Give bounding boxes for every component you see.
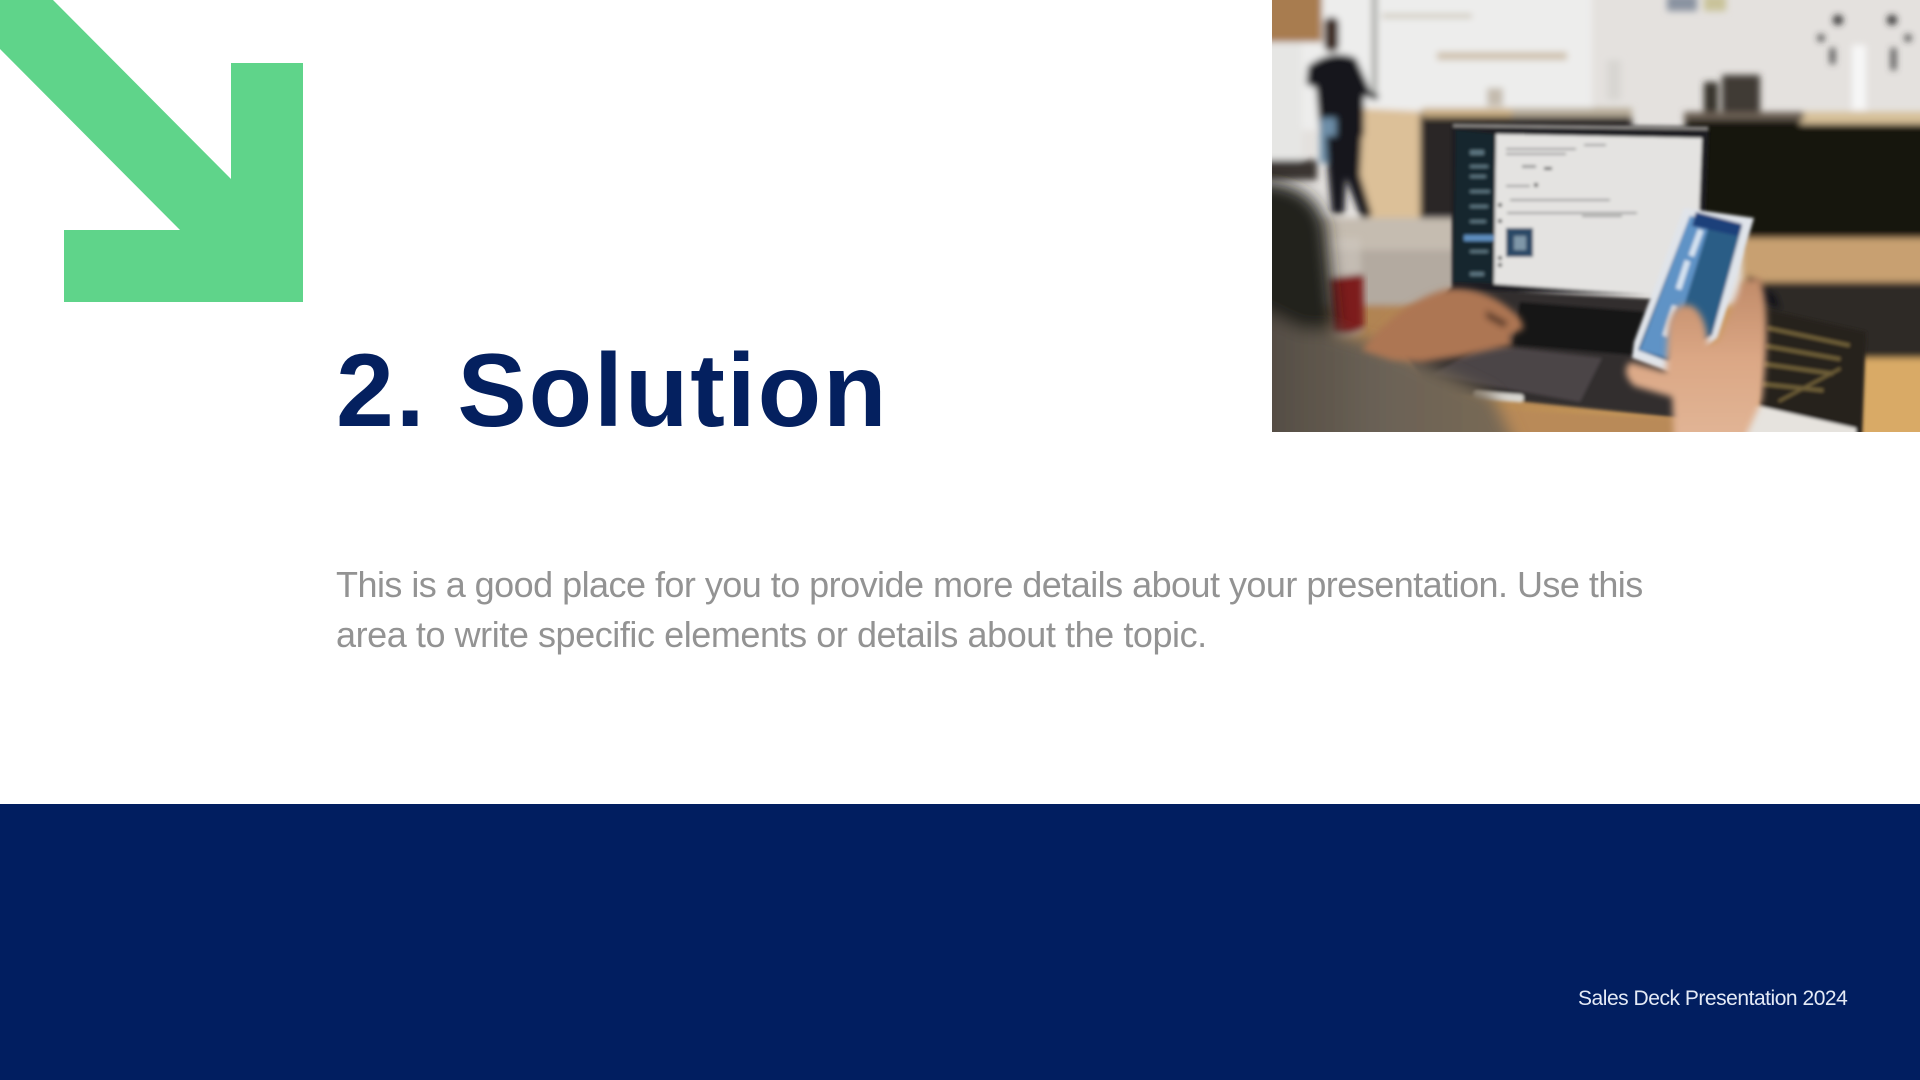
foreground shoulder and hair	[1272, 300, 1518, 432]
dark laptop bag right	[1752, 282, 1920, 358]
shelf items	[1722, 75, 1760, 115]
footer label: Sales Deck Presentation 2024	[1578, 987, 1847, 1010]
icon: green arrow pointing down-right	[0, 0, 303, 302]
body text	[336, 564, 1643, 655]
glass with red drink	[1326, 238, 1364, 339]
laptop base	[1410, 286, 1678, 419]
footer band	[0, 804, 1920, 1080]
wall background	[1272, 0, 1920, 306]
wood strip in front	[1604, 414, 1672, 432]
body text: area to write specific elements or details about the topic.	[336, 614, 1207, 655]
wall hooks	[1833, 15, 1843, 25]
laptop screen	[1494, 134, 1702, 298]
title: 2. Solution	[336, 333, 888, 449]
right hand holding phone	[1626, 277, 1767, 440]
wood counter by the person	[1354, 108, 1432, 224]
left hand	[1362, 289, 1524, 362]
wood table	[1322, 300, 1866, 432]
tables in the mid-ground	[1319, 210, 1454, 278]
person standing	[1324, 17, 1339, 52]
phone	[1632, 208, 1754, 374]
dark counters	[1420, 112, 1632, 230]
photo: person using laptop and phone in a cafe	[1272, 0, 1920, 432]
laptop lid	[1452, 123, 1709, 296]
body text: This is a good place for you to provide more details about your presentation. Use this	[336, 564, 1643, 605]
dark book with gold text	[1758, 308, 1866, 440]
